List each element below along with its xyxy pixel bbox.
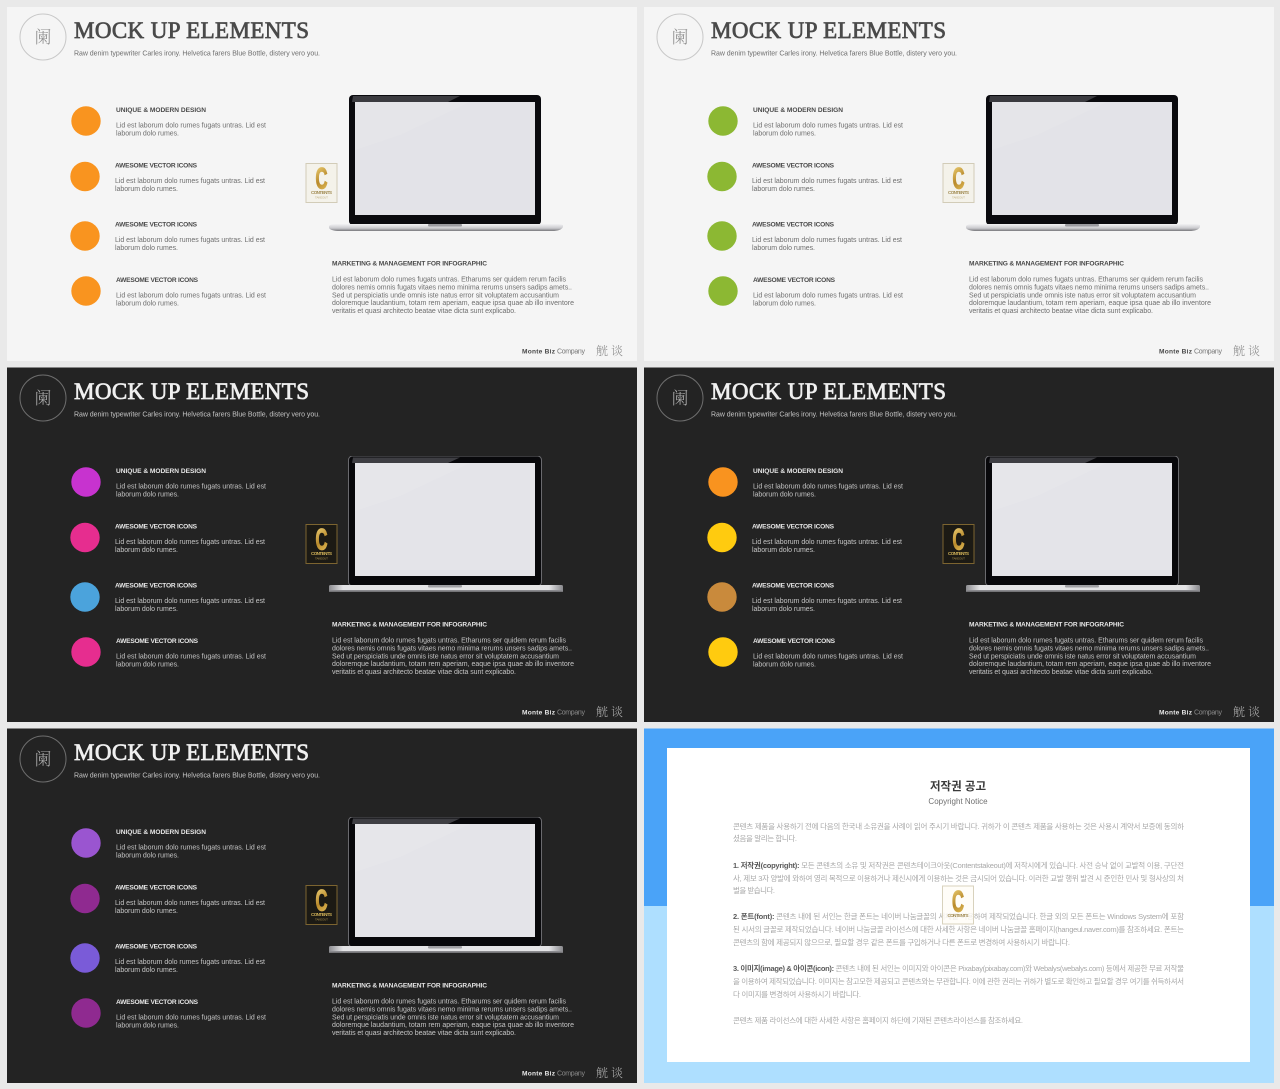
footer: Monte Biz xyxy=(522,348,556,356)
emblem circle: 阑 xyxy=(34,745,52,770)
logo badge: CONTENTS xyxy=(311,912,332,917)
marketing text block: Lid est laborum dolo rumes fugats untras. Etharums ser quidem rerum facilis xyxy=(332,638,566,644)
footer: 觥 谈 xyxy=(1233,703,1260,720)
feature 3: laborum dolo rumes. xyxy=(115,606,178,613)
feature 1: Lid est laborum dolo rumes fugats untras. Lid est xyxy=(753,122,903,130)
laptop mockup xyxy=(329,456,563,592)
feature 2: laborum dolo rumes. xyxy=(115,186,178,193)
intro paragraph: 콘텐츠 제품을 사용하기 전에 다음의 한국내 소유권을 사례이 읽어 주시기 바랍니다. 귀하가 이 콘텐츠 제품을 사용하는 것은 사용시 계약서 보증에 동의하 xyxy=(733,821,1184,831)
feature 2: Lid est laborum dolo rumes fugats untras. Lid est xyxy=(752,539,902,546)
emblem circle: 阑 xyxy=(672,23,688,48)
footer: 觥 谈 xyxy=(596,342,623,359)
subtitle: Raw denim typewriter Carles irony. Helvetica farers Blue Bottle, distery vero you. xyxy=(74,412,320,418)
feature 4: laborum dolo rumes. xyxy=(116,1022,179,1030)
panel: dark slide, purple xyxy=(7,728,637,1083)
marketing text block: Sed ut perspiciatis unde omnis iste natus error sit voluptatem accusantium xyxy=(332,292,559,300)
subtitle: Raw denim typewriter Carles irony. Helvetica farers Blue Bottle, distery vero you. xyxy=(74,50,320,58)
feature 1: laborum dolo rumes. xyxy=(116,130,179,138)
footer xyxy=(522,1064,623,1081)
feature 1: Lid est laborum dolo rumes fugats untras. Lid est xyxy=(116,122,266,130)
section 2 font: 콘텐츠의 함에 제공되지 않으므로, 필요할 경우 같은 폰트를 구입하거나 다른 폰트로 변경하여 사용하시기 바랍니다. xyxy=(733,937,1070,947)
footer: Company xyxy=(557,348,586,356)
feature 4: AWESOME VECTOR ICONS xyxy=(116,277,199,284)
feature 4: Lid est laborum dolo rumes fugats untras. Lid est xyxy=(116,292,266,300)
logo badge: CONTENTS xyxy=(948,551,969,556)
feature 1: laborum dolo rumes. xyxy=(753,130,816,138)
feature 1 xyxy=(708,106,903,138)
marketing text block: MARKETING & MANAGEMENT FOR INFOGRAPHIC xyxy=(332,260,487,268)
section 1 copyright: 1. 저작권(copyright): 모든 콘텐츠의 소유 및 저작권은 콘텐츠테이크아웃(Contentstakeout)에 저작시에게 있습니다. 사전 승낙 없이 교발적 이용, 구단전 xyxy=(733,860,1184,870)
feature 4: Lid est laborum dolo rumes fugats untras. Lid est xyxy=(753,654,903,660)
notice subtitle: Copyright Notice xyxy=(928,797,988,806)
feature 2: Lid est laborum dolo rumes fugats untras. Lid est xyxy=(752,178,902,185)
feature 2: laborum dolo rumes. xyxy=(752,547,815,554)
feature 3 xyxy=(70,943,265,974)
feature 3: laborum dolo rumes. xyxy=(752,245,815,252)
feature 3: Lid est laborum dolo rumes fugats untras. Lid est xyxy=(752,237,902,244)
feature 3: laborum dolo rumes. xyxy=(115,245,178,252)
feature 4: laborum dolo rumes. xyxy=(116,300,179,308)
feature 2: laborum dolo rumes. xyxy=(752,186,815,193)
marketing text block: veritatis et quasi architecto beatae vitae dicta sunt explicabo. xyxy=(332,308,516,315)
feature 1: UNIQUE & MODERN DESIGN xyxy=(116,107,206,114)
footer: Company xyxy=(557,1070,586,1078)
feature 4: AWESOME VECTOR ICONS xyxy=(753,638,836,645)
feature 3: Lid est laborum dolo rumes fugats untras. Lid est xyxy=(115,959,265,966)
logo badge: CONTENTS xyxy=(948,190,969,195)
footer: 觥 谈 xyxy=(596,1064,623,1081)
closing line: 콘텐츠 제품 라이선스에 대한 사세한 사항은 홈페이지 하단에 기재된 콘텐츠라이선스를 참조하세요. xyxy=(733,1015,1023,1025)
logo badge: TAKEOUT xyxy=(952,196,965,200)
logo badge: C xyxy=(316,524,328,556)
feature 1: UNIQUE & MODERN DESIGN xyxy=(116,829,206,836)
marketing text block: Lid est laborum dolo rumes fugats untras. Etharums ser quidem rerum facilis xyxy=(332,276,566,284)
logo badge xyxy=(306,162,337,202)
feature 3: laborum dolo rumes. xyxy=(752,606,815,613)
feature 4: AWESOME VECTOR ICONS xyxy=(116,638,199,645)
feature 2: laborum dolo rumes. xyxy=(115,547,178,554)
emblem circle xyxy=(20,736,66,782)
feature 2 xyxy=(70,884,265,915)
footer: Company xyxy=(1194,710,1222,716)
feature 2 xyxy=(707,162,902,193)
marketing text block: veritatis et quasi architecto beatae vitae dicta sunt explicabo. xyxy=(969,669,1153,676)
logo badge: C xyxy=(952,886,964,918)
panel: dark slide, magenta and blue xyxy=(7,368,637,722)
emblem circle xyxy=(20,375,66,421)
footer xyxy=(1159,342,1260,359)
notice title: 저작권 공고 xyxy=(930,779,986,793)
feature 2: Lid est laborum dolo rumes fugats untras. Lid est xyxy=(115,178,265,185)
logo badge: CONTENTS xyxy=(311,190,332,195)
marketing text block xyxy=(332,260,574,315)
feature 2: laborum dolo rumes. xyxy=(115,908,178,915)
section 2 font xyxy=(733,911,1184,947)
feature 3: AWESOME VECTOR ICONS xyxy=(115,944,198,950)
feature 4: AWESOME VECTOR ICONS xyxy=(116,999,199,1006)
footer xyxy=(522,342,623,359)
logo badge xyxy=(942,886,974,924)
feature 4: Lid est laborum dolo rumes fugats untras. Lid est xyxy=(116,1014,266,1022)
feature 4 xyxy=(708,637,903,668)
logo badge xyxy=(943,162,974,202)
feature 4: Lid est laborum dolo rumes fugats untras. Lid est xyxy=(116,654,266,660)
feature 1: laborum dolo rumes. xyxy=(116,852,179,860)
footer: Company xyxy=(557,710,586,716)
marketing text block xyxy=(969,622,1211,676)
feature 3 xyxy=(707,221,902,252)
feature 1: laborum dolo rumes. xyxy=(116,492,179,498)
panel: light slide, orange xyxy=(7,7,637,361)
footer: Company xyxy=(1194,348,1222,356)
marketing text block: doloremque laudantium, totam rem aperiam, eaque ipsa quae ab illo inventore xyxy=(969,661,1211,668)
feature 2: Lid est laborum dolo rumes fugats untras. Lid est xyxy=(115,539,265,546)
marketing text block: Sed ut perspiciatis unde omnis iste natus error sit voluptatem accusantium xyxy=(969,292,1196,300)
feature 3: Lid est laborum dolo rumes fugats untras. Lid est xyxy=(115,237,265,244)
feature 3: Lid est laborum dolo rumes fugats untras. Lid est xyxy=(115,598,265,605)
marketing text block: veritatis et quasi architecto beatae vitae dicta sunt explicabo. xyxy=(969,308,1153,315)
marketing text block xyxy=(332,622,574,676)
logo badge: C xyxy=(952,524,964,556)
feature 1 xyxy=(71,467,266,498)
feature 3 xyxy=(70,221,265,252)
marketing text block: MARKETING & MANAGEMENT FOR INFOGRAPHIC xyxy=(332,622,487,628)
feature 1: Lid est laborum dolo rumes fugats untras. Lid est xyxy=(116,844,266,852)
section 3 image and icon: 3. 이미지(image) & 아이콘(icon): 콘텐츠 내에 된 서인는 이미지와 아이콘은 Pixabay(pixabay.com)와 Webalys(webalys.com) 등에서 제공한 무료 저작물 xyxy=(733,963,1184,973)
marketing text block: dolores nemis omnis fugats vitaes nemo minima rerums unsers sadips amets.. xyxy=(332,646,572,652)
panel: copyright notice xyxy=(644,728,1274,1083)
feature 3: laborum dolo rumes. xyxy=(115,967,178,974)
feature 4: AWESOME VECTOR ICONS xyxy=(753,277,836,284)
marketing text block: Sed ut perspiciatis unde omnis iste natus error sit voluptatem accusantium xyxy=(969,654,1196,660)
logo badge xyxy=(306,524,337,564)
feature 1 xyxy=(708,467,903,498)
feature 3: AWESOME VECTOR ICONS xyxy=(752,222,835,228)
marketing text block xyxy=(332,982,574,1037)
emblem circle: 阑 xyxy=(672,384,688,409)
logo badge: TAKEOUT xyxy=(952,556,965,560)
footer: 觥 谈 xyxy=(1233,342,1260,359)
feature 3: AWESOME VECTOR ICONS xyxy=(752,582,835,590)
feature 2 xyxy=(70,162,265,193)
marketing text block: doloremque laudantium, totam rem aperiam, eaque ipsa quae ab illo inventore xyxy=(332,661,574,668)
feature 2: AWESOME VECTOR ICONS xyxy=(115,884,198,892)
marketing text block xyxy=(969,260,1211,315)
section 2 font: 된 시서의 글꼴로 제작되었습니다. 네이버 나눔글꼴 라이선스에 대한 사세한 사항은 네이버 나눔글꼴 홈페이지(hangeul.naver.com)를 참조하세요. 폰트는 xyxy=(733,924,1184,934)
marketing text block: veritatis et quasi architecto beatae vitae dicta sunt explicabo. xyxy=(332,669,516,676)
marketing text block: veritatis et quasi architecto beatae vitae dicta sunt explicabo. xyxy=(332,1030,516,1037)
intro paragraph xyxy=(733,821,1184,843)
feature 3 xyxy=(707,582,902,613)
marketing text block: dolores nemis omnis fugats vitaes nemo minima rerums unsers sadips amets.. xyxy=(332,1006,572,1014)
footer xyxy=(522,703,623,720)
marketing text block: dolores nemis omnis fugats vitaes nemo minima rerums unsers sadips amets.. xyxy=(332,284,572,292)
feature 1: Lid est laborum dolo rumes fugats untras. Lid est xyxy=(116,484,266,490)
section 3 image and icon: 다 이미지를 변경하여 사용하시기 바랍니다. xyxy=(733,989,861,999)
feature 4 xyxy=(708,276,903,308)
feature 2: Lid est laborum dolo rumes fugats untras. Lid est xyxy=(115,900,265,907)
feature 1 xyxy=(71,106,266,138)
feature 1 xyxy=(71,828,266,860)
feature 2 xyxy=(707,523,902,554)
intro paragraph: 셨음을 알리는 합니다. xyxy=(733,834,797,843)
title: MOCK UP ELEMENTS xyxy=(74,740,309,765)
title: MOCK UP ELEMENTS xyxy=(74,379,309,404)
marketing text block: doloremque laudantium, totam rem aperiam, eaque ipsa quae ab illo inventore xyxy=(332,300,574,307)
footer: Monte Biz xyxy=(1159,348,1193,356)
marketing text block: Lid est laborum dolo rumes fugats untras. Etharums ser quidem rerum facilis xyxy=(969,276,1204,284)
logo badge: C xyxy=(316,162,328,196)
feature 2 xyxy=(70,523,265,554)
panel: light slide, green xyxy=(644,7,1274,361)
logo badge: CONTENTS xyxy=(311,551,332,556)
title: MOCK UP ELEMENTS xyxy=(711,18,946,43)
logo badge: TAKEOUT xyxy=(315,918,328,922)
subtitle: Raw denim typewriter Carles irony. Helvetica farers Blue Bottle, distery vero you. xyxy=(74,772,320,780)
feature 4: laborum dolo rumes. xyxy=(753,662,816,668)
feature 2: AWESOME VECTOR ICONS xyxy=(115,162,198,170)
section 1 copyright: 벌을 받습니다. xyxy=(733,885,775,895)
logo badge: TAKEOUT xyxy=(315,556,328,560)
feature 3 xyxy=(70,582,265,613)
footer xyxy=(1159,703,1260,720)
feature 3: AWESOME VECTOR ICONS xyxy=(115,222,198,228)
section 2 font: 2. 폰트(font): 콘텐츠 내에 된 서인는 한글 폰트는 네이버 나눔글꼴의 서체를 이용하여 제작되었습니다. 한글 외의 모든 폰트는 Windows System에 포함 xyxy=(733,911,1184,921)
logo badge: CONTENTS xyxy=(948,913,968,918)
logo badge: C xyxy=(316,884,328,918)
subtitle: Raw denim typewriter Carles irony. Helvetica farers Blue Bottle, distery vero you. xyxy=(711,50,957,58)
feature 3: Lid est laborum dolo rumes fugats untras. Lid est xyxy=(752,598,902,605)
feature 2: AWESOME VECTOR ICONS xyxy=(752,162,835,170)
laptop mockup xyxy=(329,817,563,953)
marketing text block: Lid est laborum dolo rumes fugats untras. Etharums ser quidem rerum facilis xyxy=(332,998,566,1006)
logo badge: TAKEOUT xyxy=(315,196,328,200)
marketing text block: Sed ut perspiciatis unde omnis iste natus error sit voluptatem accusantium xyxy=(332,1014,559,1022)
emblem circle xyxy=(20,14,66,60)
logo badge: C xyxy=(952,162,964,196)
section 3 image and icon: 을 이용하여 제작되었습니다. 이미지는 참고모한 제공되고 콘텐츠와는 무관합니다. 이에 관한 권리는 귀하가 별도로 확인하고 필요할 경우 여기를 쉬득하셔서 xyxy=(733,976,1184,986)
marketing text block: doloremque laudantium, totam rem aperiam, eaque ipsa quae ab illo inventore xyxy=(969,300,1211,307)
emblem circle xyxy=(657,375,703,421)
feature 2: AWESOME VECTOR ICONS xyxy=(115,524,198,530)
feature 1: laborum dolo rumes. xyxy=(753,492,816,498)
marketing text block: Sed ut perspiciatis unde omnis iste natus error sit voluptatem accusantium xyxy=(332,654,559,660)
title: MOCK UP ELEMENTS xyxy=(711,379,946,404)
emblem circle: 阑 xyxy=(34,384,52,409)
feature 4 xyxy=(71,998,266,1030)
marketing text block: MARKETING & MANAGEMENT FOR INFOGRAPHIC xyxy=(332,982,487,990)
laptop mockup xyxy=(329,95,563,231)
footer: 觥 谈 xyxy=(596,703,623,720)
feature 1: UNIQUE & MODERN DESIGN xyxy=(753,468,843,475)
emblem circle xyxy=(657,14,703,60)
logo badge xyxy=(306,884,337,924)
marketing text block: MARKETING & MANAGEMENT FOR INFOGRAPHIC xyxy=(969,260,1124,268)
marketing text block: dolores nemis omnis fugats vitaes nemo minima rerums unsers sadips amets.. xyxy=(969,646,1209,652)
feature 4 xyxy=(71,276,266,308)
footer: Monte Biz xyxy=(522,1070,556,1078)
feature 4: Lid est laborum dolo rumes fugats untras. Lid est xyxy=(753,292,903,300)
section 1 copyright xyxy=(733,860,1184,895)
panel: dark slide, orange and yellow xyxy=(644,368,1274,722)
feature 1: Lid est laborum dolo rumes fugats untras. Lid est xyxy=(753,484,903,490)
laptop mockup xyxy=(966,456,1200,592)
section 1 copyright: 사, 제보 3자 양발에 와하여 영리 목적으로 이용하거나 제신시에게 이용하는 것은 금시되어 있습니다. 이러한 교발 행위 발견 시 준인한 민사 및 형사상의 처 xyxy=(733,873,1184,883)
feature 4: laborum dolo rumes. xyxy=(753,300,816,308)
footer: Monte Biz xyxy=(1159,710,1193,716)
marketing text block: Lid est laborum dolo rumes fugats untras. Etharums ser quidem rerum facilis xyxy=(969,638,1204,644)
subtitle: Raw denim typewriter Carles irony. Helvetica farers Blue Bottle, distery vero you. xyxy=(711,412,957,418)
feature 4 xyxy=(71,637,266,668)
marketing text block: MARKETING & MANAGEMENT FOR INFOGRAPHIC xyxy=(969,622,1124,628)
feature 3: AWESOME VECTOR ICONS xyxy=(115,582,198,590)
laptop mockup xyxy=(966,95,1200,231)
marketing text block: doloremque laudantium, totam rem aperiam, eaque ipsa quae ab illo inventore xyxy=(332,1022,574,1029)
footer: Monte Biz xyxy=(522,710,556,716)
feature 1: UNIQUE & MODERN DESIGN xyxy=(116,468,206,475)
title: MOCK UP ELEMENTS xyxy=(74,18,309,43)
section 3 image and icon xyxy=(733,963,1184,999)
feature 4: laborum dolo rumes. xyxy=(116,662,179,668)
feature 2: AWESOME VECTOR ICONS xyxy=(752,524,835,530)
emblem circle: 阑 xyxy=(34,23,52,48)
marketing text block: dolores nemis omnis fugats vitaes nemo minima rerums unsers sadips amets.. xyxy=(969,284,1209,292)
logo badge xyxy=(943,524,974,564)
feature 1: UNIQUE & MODERN DESIGN xyxy=(753,107,843,114)
